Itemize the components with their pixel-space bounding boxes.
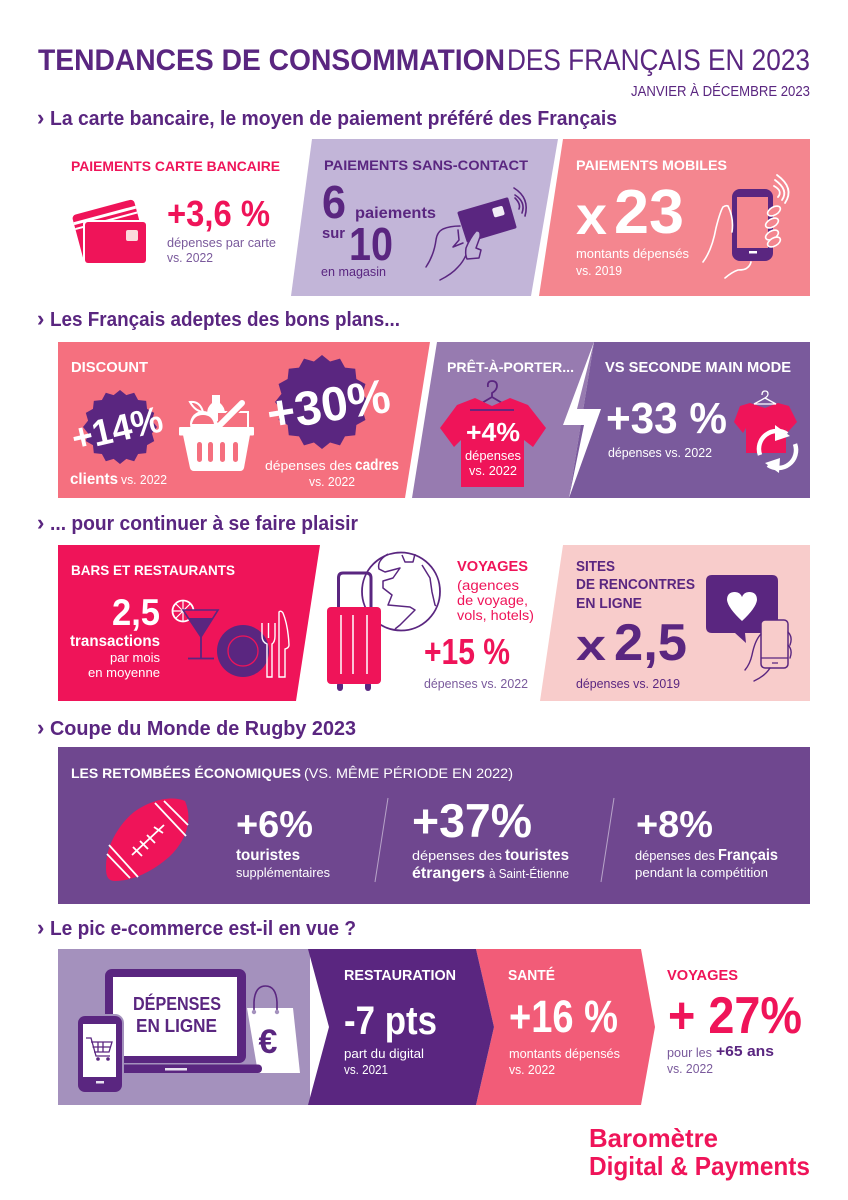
panel: paiements carte bancaire: dépenses par carte [167,236,276,250]
panel: paiements sans-contact [291,139,558,296]
panel: retombées économiques [58,747,810,904]
stat: +6% touristes: supplémentaires [236,866,330,880]
logo: Baromètre Digital & Payments: Digital & Payments [589,1151,810,1181]
panel: restauration [308,949,494,1105]
icon: t-shirt on hanger: vs. 2022 [469,463,517,478]
panel: paiements sans-contact: 6 [322,176,346,228]
panel: voyages e-commerce: + 27% [668,987,802,1045]
icon: cocktail and plate [172,600,289,677]
panel: voyages [327,552,534,691]
heading: rugby: Coupe du Monde de Rugby 2023 [50,718,356,740]
icon: t-shirt on hanger [440,381,546,487]
stat: +6% touristes: touristes [236,847,300,864]
panel: voyages e-commerce: VOYAGES [667,968,738,984]
stat: +37% touristes étrangers [412,794,569,882]
panel: sites de rencontres: 2,5 [614,614,687,672]
stat: +8% Français: dépenses des [635,849,715,863]
panel: paiements carte bancaire: +3,6 % [167,193,270,234]
panel: santé: +16 % [509,991,618,1042]
panel: paiements mobiles [539,139,810,296]
panel: sites de rencontres: SITES [576,559,615,575]
panel: retombées économiques: LES RETOMBÉES ÉCONOMIQUES [71,765,301,781]
icon: shopping bag: € [259,1023,278,1061]
stat: +8% Français: Français [718,847,778,864]
panel: sites de rencontres [540,545,810,701]
panel: paiements sans-contact: 10 [349,218,393,270]
panel: voyages e-commerce: pour les [667,1046,712,1060]
panel: restauration: -7 pts [344,999,437,1043]
heading: e-commerce: › [37,915,44,940]
stat: +37% touristes étrangers: dépenses des [412,849,502,863]
icon: suitcase and globe [327,552,440,691]
panel: bars et restaurants: par mois [110,651,160,665]
panel: bars et restaurants: transactions [70,633,160,650]
panel: seconde main mode [569,342,810,498]
panel: paiements mobiles: PAIEMENTS MOBILES [576,157,727,173]
panel: santé: vs. 2022 [509,1063,555,1077]
panel: discount: cadres [355,457,399,474]
panel: retombées économiques: (VS. MÊME PÉRIODE EN 2022) [304,765,513,781]
panel: voyages: vols, hotels) [457,607,534,623]
title: DES FRANÇAIS EN 2023 [507,44,810,77]
heading: carte bancaire: La carte bancaire, le moyen de paiement préféré des Français [50,108,617,130]
heading: bons plans: › [37,306,44,331]
icon: mobile phone in hand [703,175,789,278]
panel: paiements sans-contact: PAIEMENTS SANS-CONTACT [324,157,528,173]
panel: voyages: VOYAGES [457,559,528,575]
stat: +37% touristes étrangers: à Saint-Étienne [489,866,569,881]
panel: discount [58,342,430,498]
panel: bars et restaurants: BARS ET RESTAURANTS [71,562,235,578]
icon: contactless card in hand [426,188,526,280]
badge: +14% clients: +14% [68,398,167,459]
stat: +8% Français: +8% [636,804,713,845]
icon: lightning bolt [563,342,601,498]
stat: +37% touristes étrangers: touristes [505,847,569,864]
panel: seconde main mode: dépenses vs. 2022 [608,446,712,460]
icon: laptop [105,969,262,1073]
panel: voyages: +15 % [424,631,510,672]
panel: voyages: (agences [457,577,519,593]
logo: Baromètre Digital & Payments: Baromètre [589,1123,718,1153]
panel: dépenses en ligne [58,949,310,1105]
panel: paiements carte bancaire [71,158,280,265]
panel: sites de rencontres: dépenses vs. 2019 [576,677,680,691]
stat: +8% Français: pendant la compétition [635,866,768,880]
heading: rugby: › [37,715,44,740]
stat: +37% touristes étrangers: étrangers [412,865,485,882]
panel: santé: SANTÉ [508,967,555,984]
panel: bars et restaurants: 2,5 [112,592,160,633]
panel: voyages e-commerce: +65 ans [716,1043,774,1060]
panel: sites de rencontres: x [576,621,607,670]
title: TENDANCES DE CONSOMMATION [38,44,505,77]
panel: santé [476,949,655,1105]
icon: laptop: DÉPENSES [133,993,221,1014]
panel: discount: vs. 2022 [309,475,355,489]
panel: restauration: vs. 2021 [344,1063,388,1077]
panel: paiements carte bancaire: vs. 2022 [167,251,213,265]
panel: bars et restaurants: en moyenne [88,666,160,680]
panel: voyages: dépenses vs. 2022 [424,677,528,691]
heading: se faire plaisir: ... pour continuer à se faire plaisir [50,513,358,535]
panel: santé: montants dépensés [509,1047,620,1061]
panel: voyages e-commerce: vs. 2022 [667,1062,713,1076]
title [38,44,810,77]
panel: paiements mobiles: montants dépensés [576,247,689,261]
stat: +6% touristes [236,804,330,880]
panel: sites de rencontres: DE RENCONTRES [576,577,695,593]
panel: paiements carte bancaire: PAIEMENTS CARTE BANCAIRE [71,158,280,174]
panel: discount: vs. 2022 [121,473,167,487]
panel: voyages: de voyage, [457,592,528,608]
badge: +30% cadres: +30% [263,370,394,442]
stat: +8% Français [635,804,778,880]
icon: smartphone with cart [76,1014,124,1094]
panel: discount: dépenses des [265,459,352,473]
logo: Baromètre Digital & Payments [589,1123,810,1181]
icon: shopping basket [179,395,254,471]
heading: e-commerce: Le pic e-commerce est-il en vue ? [50,918,356,940]
icon: shopping bag [247,986,300,1073]
panel: restauration: part du digital [344,1047,424,1061]
panel: paiements mobiles: vs. 2019 [576,264,622,278]
stat: +37% touristes étrangers: +37% [412,794,532,847]
panel: discount: clients [70,471,118,488]
panel: paiements mobiles: x [576,186,607,246]
icon: chat bubble and phone [706,575,791,681]
icon: laptop: EN LIGNE [136,1016,217,1036]
panel: paiements sans-contact: paiements [355,205,436,222]
icon: t-shirt on hanger: dépenses [465,448,521,463]
icon: bank cards [72,199,148,264]
panel: prêt-à-porter [412,342,594,498]
heading: se faire plaisir: › [37,510,44,535]
panel: paiements mobiles: 23 [614,178,684,247]
panel: paiements sans-contact: en magasin [321,265,386,279]
heading: bons plans: Les Français adeptes des bons plans... [50,309,400,331]
panel: seconde main mode: VS SECONDE MAIN MODE [605,360,791,376]
panel: voyages e-commerce [667,968,802,1076]
icon: rugby ball [106,798,188,881]
panel: discount: DISCOUNT [71,360,148,376]
panel: bars et restaurants [58,545,320,701]
subtitle: period: JANVIER À DÉCEMBRE 2023 [631,83,810,100]
stat: +6% touristes: +6% [236,804,313,845]
icon: t-shirt with recycle arrows [734,391,797,473]
heading: carte bancaire: › [37,105,44,130]
panel: sites de rencontres: EN LIGNE [576,596,642,612]
icon: t-shirt on hanger: +4% [466,417,520,447]
panel: paiements sans-contact: sur [322,225,345,242]
panel: prêt-à-porter: PRÊT-À-PORTER... [447,358,574,375]
panel: restauration: RESTAURATION [344,968,456,984]
panel: seconde main mode: +33 % [606,394,727,443]
